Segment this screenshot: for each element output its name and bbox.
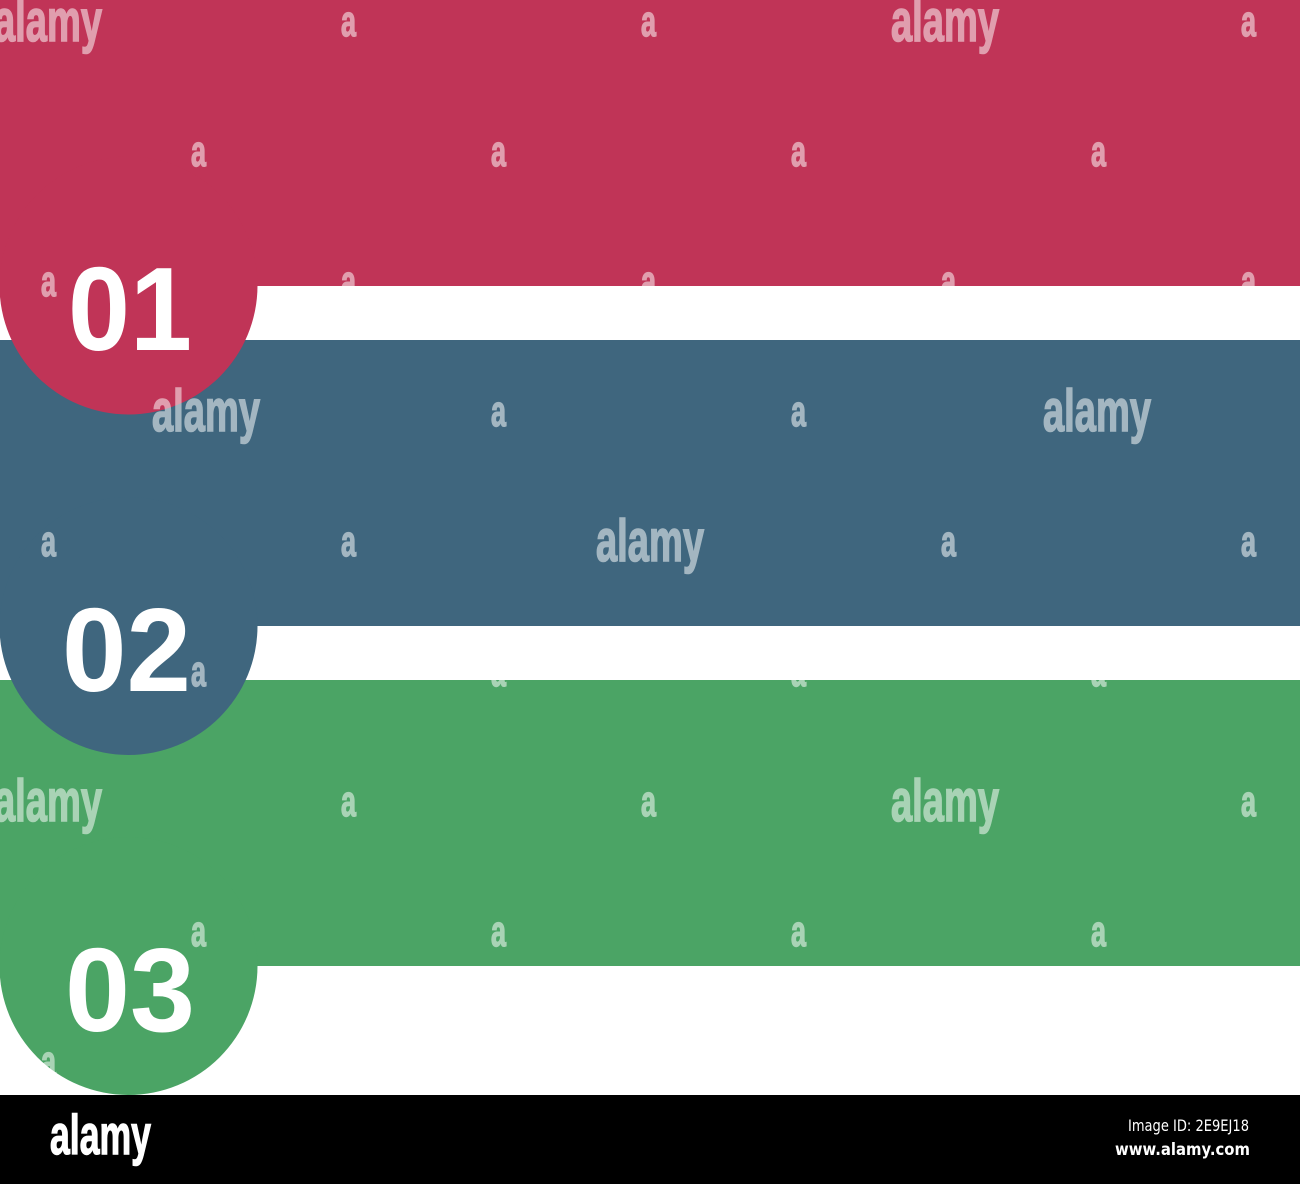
watermark pattern: a (1241, 777, 1256, 826)
panel: band 03 green (0, 680, 1300, 1095)
watermark pattern: a (1091, 907, 1106, 956)
watermark pattern: a (191, 647, 206, 696)
watermark pattern: a (191, 127, 206, 176)
number 03: 03 (65, 924, 195, 1057)
watermark pattern: a (1241, 257, 1256, 306)
watermark pattern: a (791, 387, 806, 436)
watermark pattern: a (341, 517, 356, 566)
footer bar (0, 1095, 1300, 1184)
watermark pattern: a (641, 777, 656, 826)
watermark pattern: a (41, 517, 56, 566)
panel: band 01 red (0, 0, 1300, 414)
watermark pattern: a (1091, 127, 1106, 176)
panel: band 02 blue (0, 340, 1300, 755)
watermark pattern: a (1091, 647, 1106, 696)
watermark pattern: a (941, 257, 956, 306)
watermark pattern: a (1241, 517, 1256, 566)
watermark pattern: a (341, 257, 356, 306)
watermark pattern: a (491, 127, 506, 176)
watermark pattern: a (491, 387, 506, 436)
watermark pattern: a (341, 777, 356, 826)
watermark pattern: alamy (1043, 378, 1151, 444)
watermark pattern: a (491, 907, 506, 956)
image id: Image ID: 2E9EJ18 (1128, 1116, 1249, 1135)
watermark pattern: a (491, 647, 506, 696)
watermark pattern: a (191, 907, 206, 956)
watermark pattern: a (791, 127, 806, 176)
watermark pattern: alamy (891, 768, 999, 834)
watermark pattern: a (941, 517, 956, 566)
watermark pattern: a (41, 257, 56, 306)
footer logo: alamy (50, 1103, 151, 1166)
watermark pattern: a (791, 647, 806, 696)
watermark pattern: alamy (152, 378, 260, 444)
number 01: 01 (68, 243, 192, 376)
watermark pattern: a (41, 1037, 56, 1086)
number 02: 02 (62, 584, 191, 717)
website url: www.alamy.com (1115, 1140, 1250, 1160)
watermark pattern: a (641, 257, 656, 306)
watermark pattern: a (791, 907, 806, 956)
watermark pattern: alamy (596, 508, 704, 574)
